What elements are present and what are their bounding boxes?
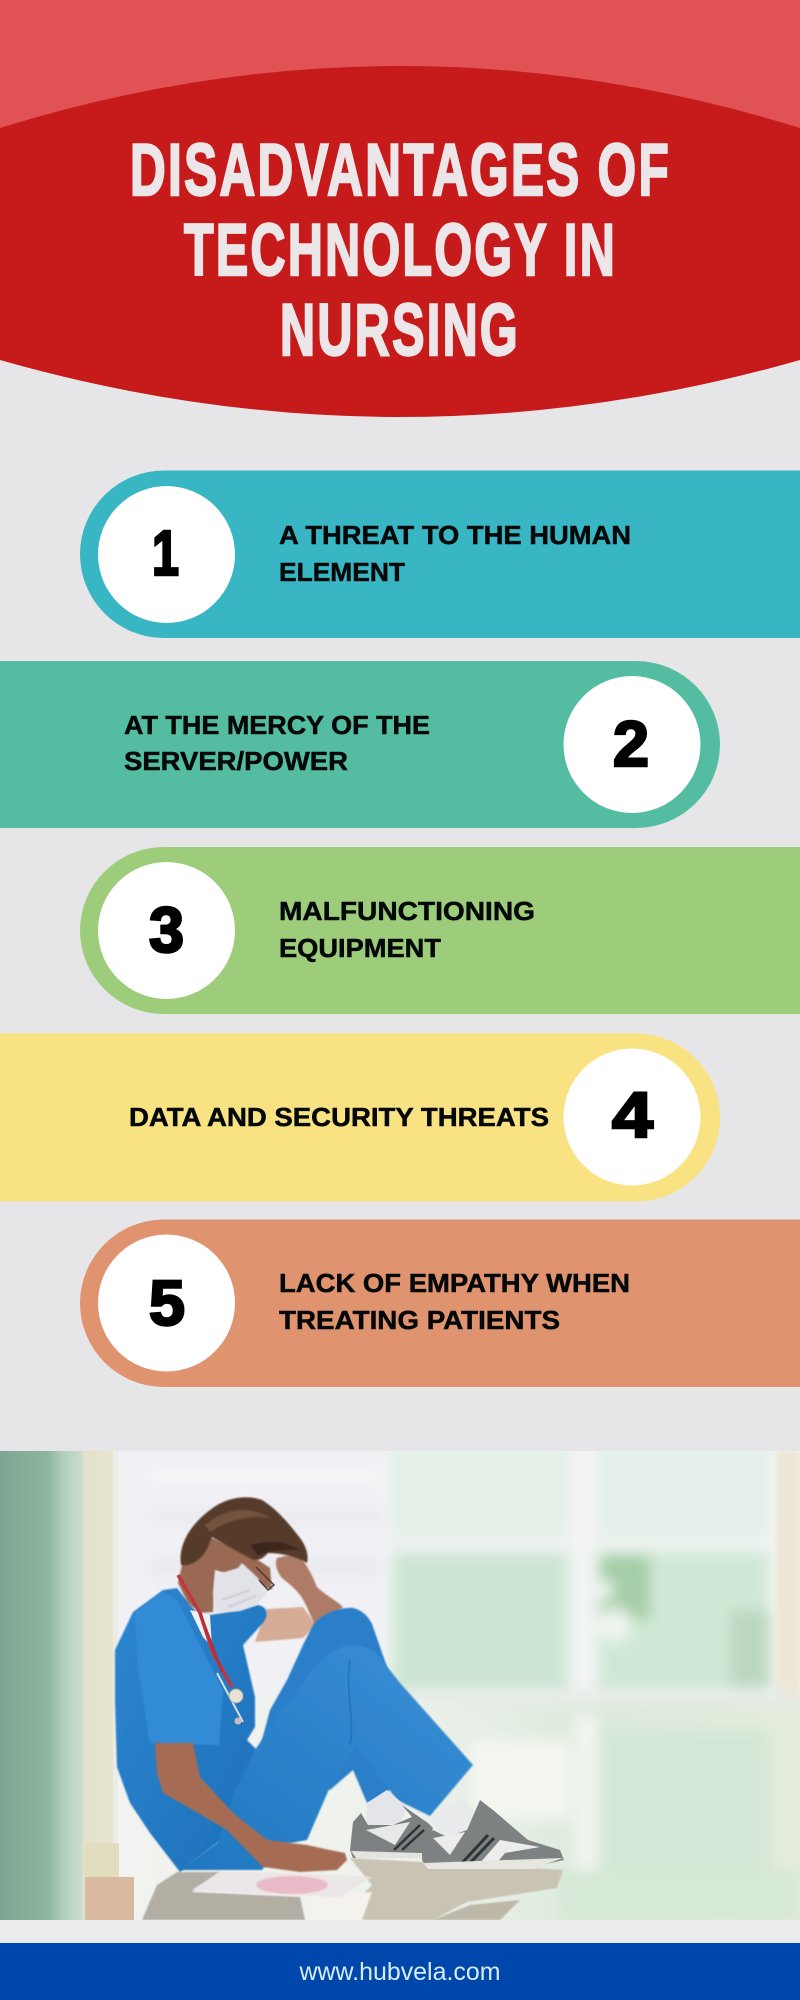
panel: item 2: 2 (613, 708, 649, 780)
title (130, 130, 671, 371)
upper arm (255, 1607, 316, 1642)
panel: item 3: MALFUNCTIONING (279, 896, 535, 926)
panel: item 2: SERVER/POWER (124, 746, 348, 776)
photo: tired nurse sitting on hospital floor (0, 1440, 800, 1920)
panel: item 5 (80, 1220, 800, 1387)
panel: item 4: DATA AND SECURITY THREATS (129, 1102, 549, 1132)
panel: item 5: TREATING PATIENTS (279, 1305, 560, 1335)
floor reflection (142, 1858, 563, 1920)
sleeve (135, 1592, 223, 1745)
panel: item 1: 1 (152, 517, 179, 589)
wall edge and baseboard (0, 1451, 134, 1920)
face mask (213, 1563, 268, 1613)
title: NURSING (280, 290, 520, 371)
panel: item 5: LACK OF EMPATHY WHEN (279, 1268, 630, 1298)
lower strip (0, 1920, 800, 1943)
panel: item 1: A THREAT TO THE HUMAN (279, 520, 631, 550)
panel: item 4: 4 (612, 1079, 653, 1151)
panel: item 3: 3 (149, 894, 184, 966)
glasses (256, 1567, 274, 1590)
forearm and hand on forehead (276, 1555, 343, 1625)
trouser folds (349, 1660, 351, 1745)
panel: item 5: 5 (149, 1267, 185, 1339)
near leg and hip (180, 1645, 473, 1870)
forearm lower (155, 1743, 347, 1872)
neck and face (178, 1537, 272, 1613)
footer url: www.hubvela.com (299, 1958, 500, 1986)
torso and shirt (115, 1588, 270, 1872)
far leg (260, 1608, 400, 1803)
panel: item 1: ELEMENT (279, 557, 405, 587)
left shoe (350, 1805, 433, 1858)
photo background: window, wall and floor (118, 1451, 800, 1920)
panel: item 2: AT THE MERCY OF THE (124, 710, 430, 740)
clipboard on floor (192, 1872, 372, 1897)
right shoe (422, 1800, 564, 1869)
stethoscope (178, 1575, 243, 1724)
header band (0, 0, 800, 417)
panel: item 1 (80, 470, 800, 638)
undershirt (190, 1610, 212, 1642)
socks (367, 1790, 475, 1825)
panel: item 3 (80, 847, 800, 1014)
panel: item 2 (0, 661, 720, 828)
hair (181, 1497, 308, 1565)
footer bar (0, 1943, 800, 2000)
panel: item 4 (0, 1034, 720, 1202)
panel: item 3: EQUIPMENT (279, 933, 441, 963)
